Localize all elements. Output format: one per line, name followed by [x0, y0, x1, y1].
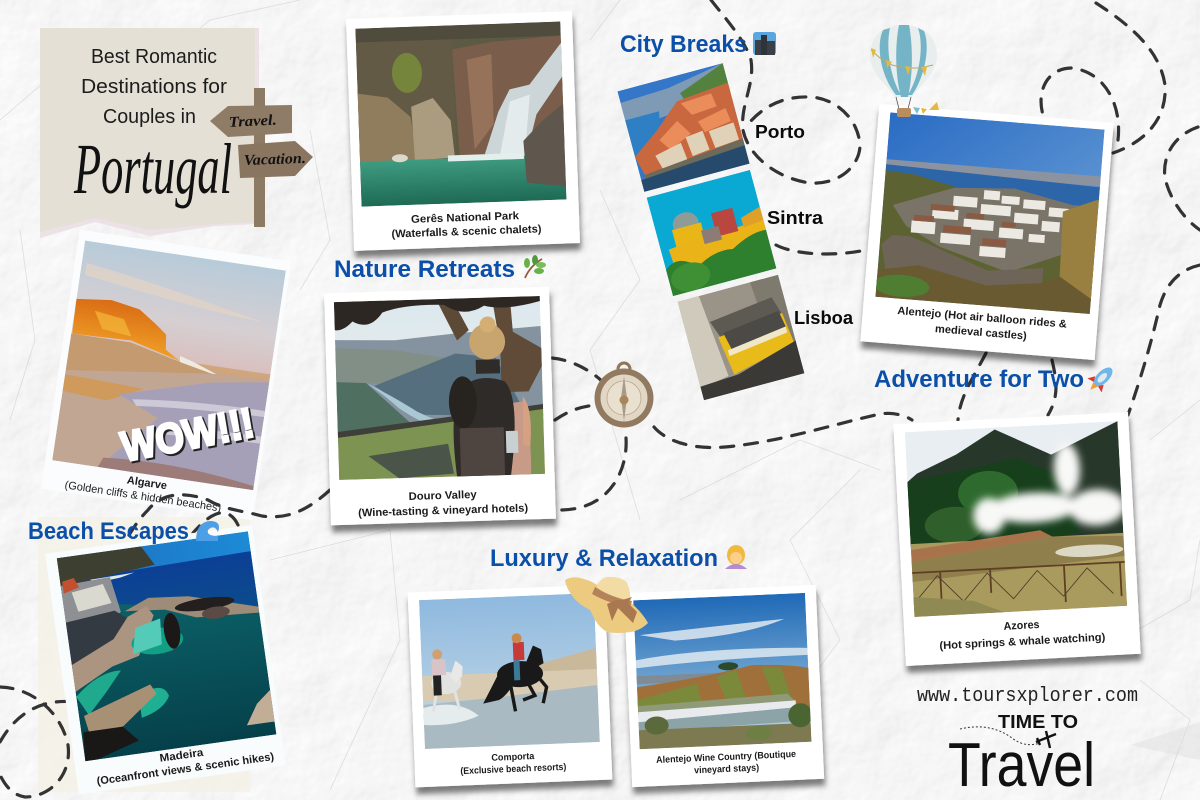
heading: Nature Retreats: Nature Retreats [334, 256, 515, 283]
polaroid: Azores: (Hot springs & whale watching) [939, 632, 1106, 652]
photo: Douro Valley viewpoint [334, 296, 545, 480]
logo: Time to Travel: TIME TO [998, 712, 1078, 732]
icon: hot air balloon [870, 25, 939, 117]
title text [81, 46, 227, 128]
caption: Comporta: Comporta [491, 751, 535, 764]
dashed route over Algarve card [125, 490, 330, 542]
polaroid: Alentejo Wine Country [624, 585, 824, 787]
title text: Couples in [103, 106, 196, 128]
title script: Portugal: Portugal [73, 129, 232, 209]
logo: Time to Travel [948, 712, 1095, 800]
title text: Best Romantic [91, 46, 217, 68]
polaroid: Alentejo Wine Country: vineyard stays) [694, 763, 759, 776]
heading: Beach Escapes: Beach Escapes [28, 518, 189, 545]
heading: Adventure for Two [874, 361, 1119, 397]
title card [40, 28, 259, 238]
photo: Geres waterfall [355, 22, 566, 207]
polaroid: Madeira: (Oceanfront views & scenic hikes) [96, 751, 275, 788]
caption: Geres: Gerês National Park [411, 210, 520, 226]
icon: wooden signpost: Travel. [228, 113, 277, 131]
icon: herb emoji [524, 255, 546, 278]
photo: Comporta horses [419, 594, 600, 749]
photo: Alentejo vineyard [633, 592, 812, 750]
icon: woman emoji [725, 545, 747, 569]
website url: www.toursxplorer.com [917, 685, 1138, 708]
photo: Algarve beach [52, 240, 286, 490]
title text: Destinations for [81, 76, 227, 98]
polaroid: Douro Valley: (Wine-tasting & vineyard hotels) [358, 502, 529, 519]
polaroid: Douro Valley [324, 287, 556, 525]
icon: compass [594, 363, 654, 428]
label: Lisboa: Lisboa [794, 307, 854, 328]
polaroid: Comporta [408, 585, 612, 787]
caption: Madeira: Madeira [159, 747, 205, 765]
icon: wave emoji [196, 521, 219, 541]
label: Sintra: Sintra [767, 207, 824, 228]
caption: Alentejo Wine Country: Alentejo Wine Country (Boutique [656, 749, 796, 766]
icon: wooden signpost [210, 88, 313, 227]
photo: Porto [617, 63, 750, 192]
caption: Alentejo: Alentejo (Hot air balloon rides & [897, 305, 1067, 331]
polaroid: Geres National Park [346, 11, 580, 251]
caption: Azores: Azores [1003, 619, 1040, 633]
polaroid: Alentejo: medieval castles) [935, 323, 1028, 343]
icon: rocket emoji [1083, 361, 1119, 397]
heading: City Breaks: City Breaks [620, 31, 747, 58]
polaroid: Algarve [41, 230, 291, 520]
heading: Adventure for Two: Adventure for Two [874, 366, 1084, 393]
polaroid: Madeira [45, 525, 286, 794]
polaroid: Geres National Park: (Waterfalls & scenic chalets) [391, 223, 542, 241]
sticker: WOW!!!: WOW!!! [117, 399, 258, 470]
polaroid: Algarve: (Golden cliffs & hidden beaches) [64, 479, 222, 515]
sticker: WOW!!!: WOW!!! [119, 400, 260, 472]
icon: wooden signpost: Vacation. [244, 151, 306, 169]
icon: cityscape emoji [753, 32, 776, 55]
icon: plane [1036, 731, 1056, 748]
icon: straw hat [565, 577, 648, 633]
logo: Time to Travel: Travel [948, 731, 1095, 800]
photo: Alentejo hilltop village [876, 112, 1104, 314]
cream paper behind Madeira [38, 517, 250, 792]
caption: Algarve: Algarve [126, 474, 168, 492]
polaroid: Alentejo [860, 104, 1114, 360]
caption: Douro Valley: Douro Valley [409, 489, 478, 503]
polaroid: Azores [893, 412, 1141, 666]
photo: Azores hot springs [905, 421, 1127, 617]
label: Porto: Porto [755, 121, 805, 142]
heading: Luxury & Relaxation: Luxury & Relaxation [490, 545, 718, 572]
photo: Lisboa [678, 275, 804, 400]
polaroid: Comporta: (Exclusive beach resorts) [460, 762, 567, 777]
photo: Madeira lagoon [56, 531, 276, 762]
photo: Sintra [647, 170, 776, 296]
